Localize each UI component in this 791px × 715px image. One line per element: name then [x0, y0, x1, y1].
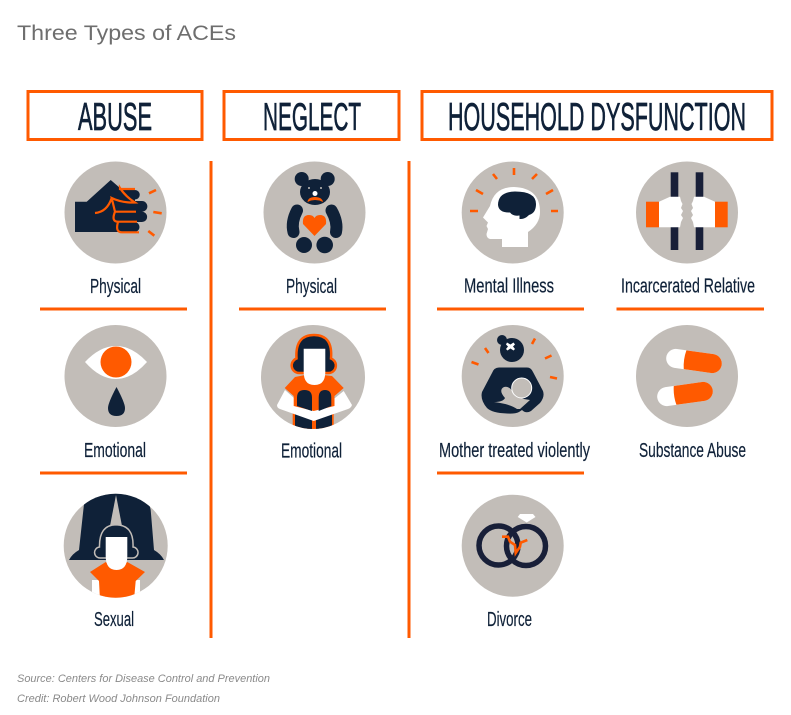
separator: abuse and neglect: [210, 161, 212, 638]
icon: fist: [64, 162, 166, 264]
label: divorce: Divorce: [487, 609, 532, 631]
icon: hands gripping prison bars: [636, 162, 738, 264]
divider: [40, 472, 187, 474]
heading: abuse: [28, 92, 202, 140]
divider: [40, 308, 187, 310]
icon: crying eye: [64, 325, 166, 427]
panel: abuse: [28, 92, 202, 631]
title: Three Types of ACEs: [17, 22, 236, 45]
heading: abuse: ABUSE: [78, 96, 152, 139]
label: emotional abuse: Emotional: [84, 440, 146, 462]
heading: neglect: NEGLECT: [263, 96, 361, 139]
icon: pill capsules: [636, 325, 738, 427]
divider: [616, 308, 764, 310]
label: physical abuse: Physical: [90, 276, 141, 298]
label: substance abuse: Substance Abuse: [639, 440, 746, 462]
label: mother treated violently: Mother treated violently: [439, 440, 590, 462]
label: mental illness: Mental Illness: [464, 276, 554, 298]
icon: broken wedding rings: [462, 495, 564, 597]
label: sexual abuse: Sexual: [94, 609, 134, 631]
credit note: Credit: Robert Wood Johnson Foundation: [17, 693, 220, 705]
heading: neglect: [224, 92, 399, 140]
label: emotional neglect: Emotional: [281, 440, 342, 462]
icon: head with brain: [462, 162, 564, 264]
icon: sad child hugging knees: [261, 325, 365, 435]
label: physical neglect: Physical: [286, 276, 337, 298]
divider: [437, 472, 584, 474]
separator: neglect and household dysfunction: [408, 161, 410, 638]
icon: teddy bear: [264, 162, 366, 264]
icon: figure under looming shadow: [64, 490, 168, 600]
divider: [437, 308, 584, 310]
panel: household dysfunction: [422, 92, 772, 631]
panel: neglect: [224, 92, 399, 462]
divider: [239, 308, 386, 310]
source note: Source: Centers for Disease Control and Prevention: [17, 673, 270, 685]
icon: injured mother with baby: [462, 325, 564, 427]
